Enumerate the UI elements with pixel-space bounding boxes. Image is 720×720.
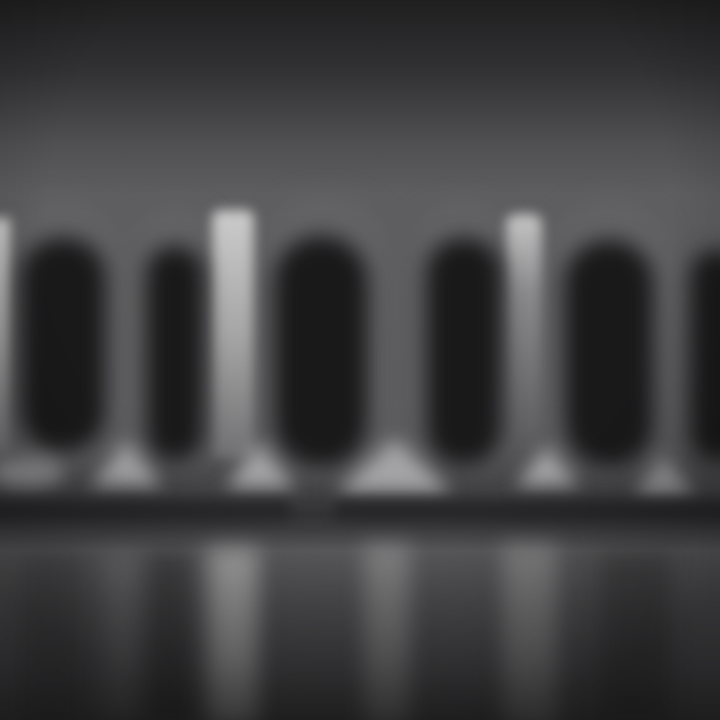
light mounds at the column bases [0, 438, 694, 494]
dark horizontal band [0, 500, 720, 520]
halo behind the dark shapes [12, 198, 668, 473]
white vertical bars [0, 210, 542, 458]
dark rounded columns [20, 236, 720, 468]
reflection streaks [20, 544, 670, 720]
